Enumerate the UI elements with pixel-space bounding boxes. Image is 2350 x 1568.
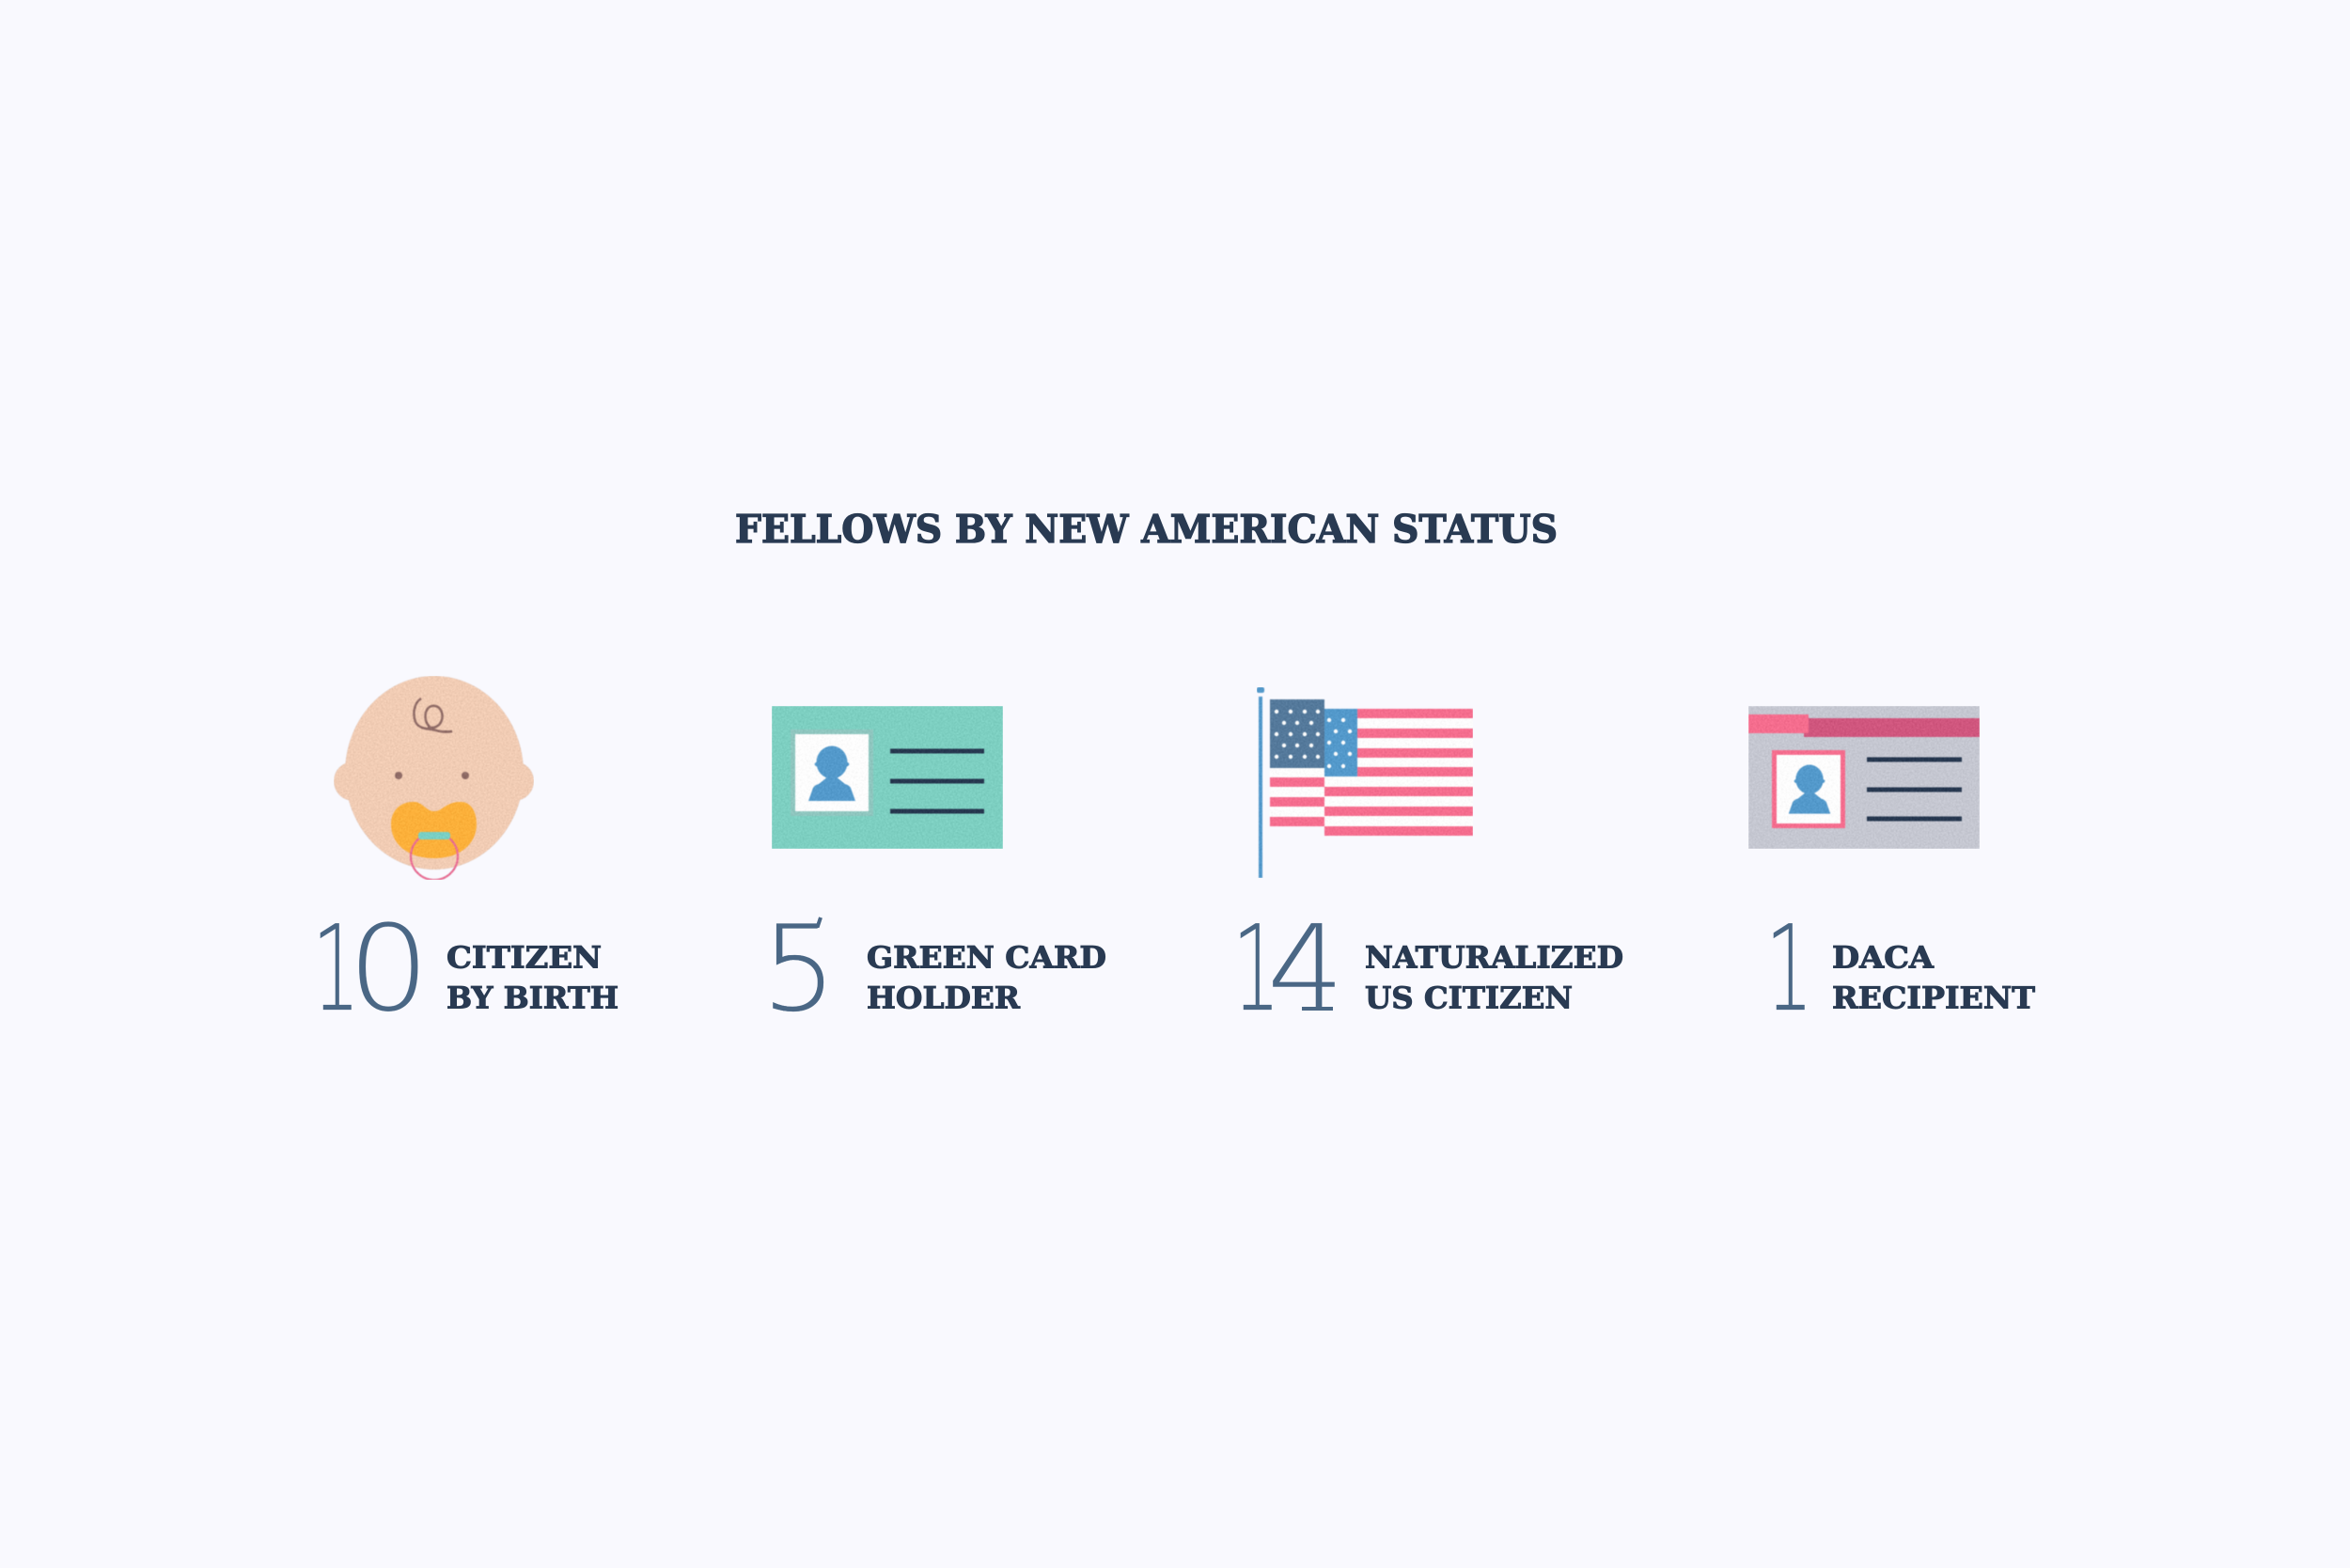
panel: naturalized us citizen [1232, 687, 1623, 1038]
number: 5: 5 [761, 900, 837, 1038]
label: green card holder: GREEN CARD [867, 940, 1106, 976]
number: 14: 1 [1232, 900, 1280, 1038]
icon: green card [772, 706, 1003, 849]
number: 1: 1 [1765, 900, 1813, 1038]
number: 10: 1 [312, 900, 360, 1038]
icon: daca card [1748, 706, 1980, 849]
number: 10: 0 [348, 900, 430, 1038]
label: citizen by birth: BY BIRTH [446, 980, 619, 1015]
label: green card holder [867, 940, 1106, 1015]
panel: daca recipient [1748, 706, 2035, 1038]
panel: green card holder [761, 706, 1106, 1038]
label: citizen by birth [446, 940, 619, 1015]
number: 10 [312, 900, 430, 1038]
label: daca recipient: DACA [1832, 940, 1935, 976]
title: FELLOWS BY NEW AMERICAN STATUS [735, 507, 1558, 552]
label: daca recipient: RECIPIENT [1832, 980, 2035, 1015]
label: daca recipient [1832, 940, 2035, 1015]
label: naturalized us citizen: US CITIZEN [1365, 980, 1573, 1015]
icon: american flag [1257, 687, 1473, 878]
label: citizen by birth: CITIZEN [446, 940, 602, 976]
number: 14: 4 [1267, 900, 1344, 1038]
label: naturalized us citizen: NATURALIZED [1365, 940, 1623, 976]
label: naturalized us citizen [1365, 940, 1623, 1015]
panel: citizen by birth [312, 676, 619, 1038]
icon: baby face [334, 676, 534, 880]
label: green card holder: HOLDER [867, 980, 1020, 1015]
number: 14 [1232, 900, 1344, 1038]
